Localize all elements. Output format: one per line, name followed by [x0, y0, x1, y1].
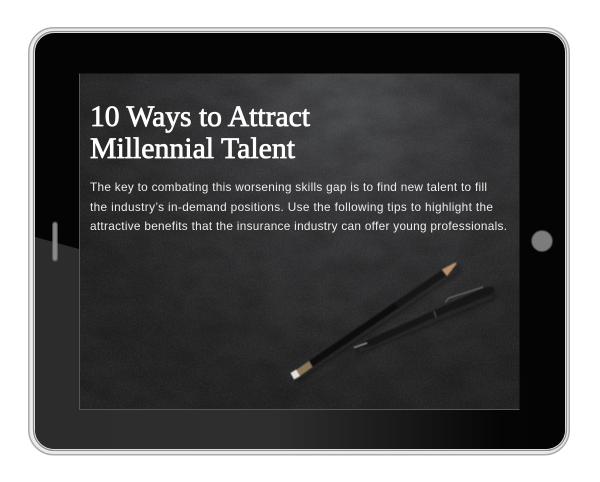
shadows — [296, 268, 496, 379]
intro text: The key to combating this worsening skills gap is to find new talent to fill — [90, 180, 487, 194]
intro text: the industry’s in-demand positions. Use the following tips to highlight the — [90, 200, 493, 214]
screen edge line — [80, 74, 520, 410]
intro text — [90, 180, 507, 233]
title — [90, 100, 311, 165]
title: Millennial Talent — [90, 132, 296, 165]
tablet black bezel — [35, 33, 565, 449]
tablet metal frame — [29, 28, 569, 455]
pen — [353, 287, 495, 348]
home button — [532, 230, 552, 252]
bezel glare — [35, 237, 565, 449]
illustration: pencil and pen — [290, 260, 496, 380]
side slot highlight — [52, 222, 58, 261]
screen panel — [80, 74, 520, 410]
leather texture — [80, 74, 519, 409]
mottled shading — [80, 74, 519, 409]
pencil — [290, 260, 459, 380]
intro text: attractive benefits that the insurance industry can offer young professionals. — [90, 219, 507, 233]
screen background — [80, 74, 520, 410]
title: 10 Ways to Attract — [90, 100, 311, 133]
tablet device — [29, 28, 569, 455]
